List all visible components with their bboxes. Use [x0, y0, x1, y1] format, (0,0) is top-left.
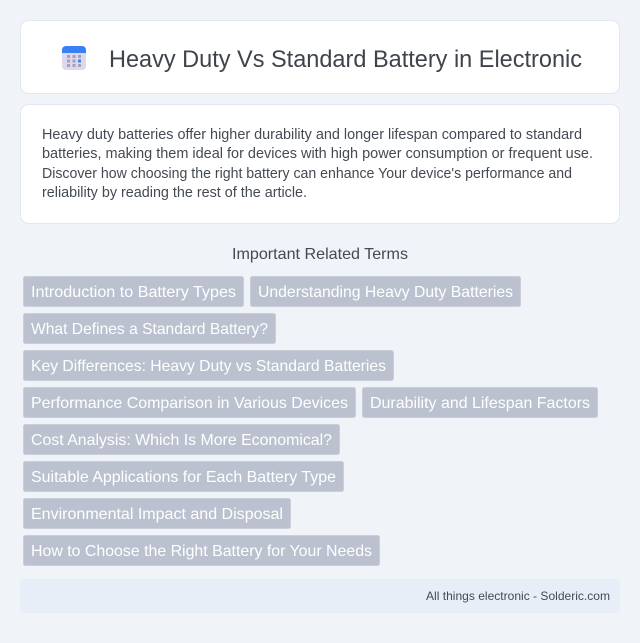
tag: cost analysis [24, 424, 340, 454]
text block: introduction [42, 127, 593, 201]
panel: header [20, 20, 620, 94]
tag: environmental impact [24, 498, 290, 528]
icon: calendar [62, 46, 86, 70]
tag: performance comparison: Performance Comparison in Various Devices [31, 395, 348, 412]
tag: cost analysis: Cost Analysis: Which Is More Economical? [31, 432, 332, 449]
tag: introduction to battery types [24, 276, 244, 306]
tag: key differences [24, 350, 394, 380]
tag: durability and lifespan [362, 388, 598, 418]
text block: introduction: Heavy duty batteries offer higher durability and longer lifespan compared to standard [42, 127, 582, 143]
panel: introduction [20, 104, 620, 224]
text block: introduction: Discover how choosing the right battery can enhance Your device's performance and [42, 166, 572, 182]
text block: introduction: reliability by reading the rest of the article. [42, 185, 307, 201]
tag: how to choose [24, 536, 380, 566]
tag: what defines a standard battery [24, 314, 276, 344]
footer: All things electronic - Solderic.com [426, 589, 610, 603]
title: Heavy Duty Vs Standard Battery in Electronic [109, 46, 582, 73]
tag: understanding heavy duty batteries [250, 276, 520, 306]
tag: environmental impact: Environmental Impact and Disposal [31, 506, 283, 523]
tag: understanding heavy duty batteries: Understanding Heavy Duty Batteries [258, 284, 513, 301]
text block: introduction: batteries, making them ideal for devices with high power consumption or frequent use. [42, 146, 593, 162]
tag: how to choose: How to Choose the Right Battery for Your Needs [31, 543, 372, 560]
tag: suitable applications [24, 462, 344, 492]
tag: what defines a standard battery: What Defines a Standard Battery? [31, 321, 268, 338]
tag: key differences: Key Differences: Heavy Duty vs Standard Batteries [31, 358, 386, 375]
tag: introduction to battery types: Introduction to Battery Types [31, 284, 236, 301]
heading: important related terms: Important Related Terms [232, 246, 408, 263]
footer [20, 579, 620, 613]
tag: durability and lifespan: Durability and Lifespan Factors [370, 395, 590, 412]
tag: suitable applications: Suitable Applications for Each Battery Type [31, 469, 336, 486]
tag: performance comparison [24, 388, 356, 418]
